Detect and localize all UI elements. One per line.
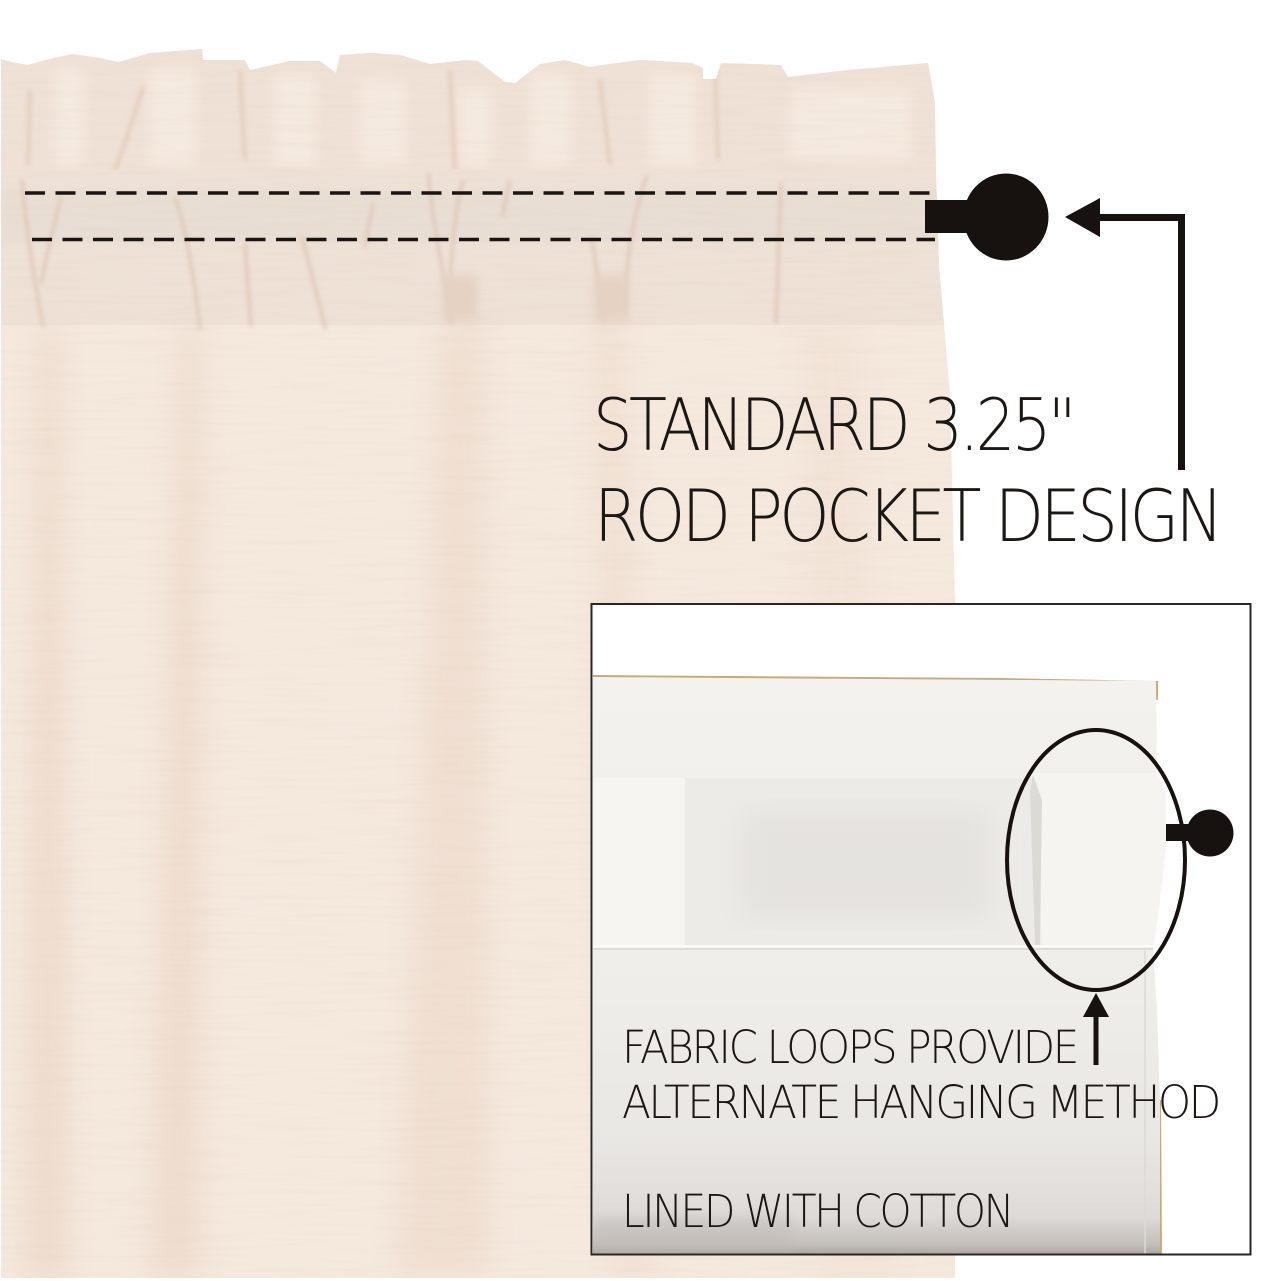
body folds xyxy=(22,334,647,1278)
gathered ruffle header xyxy=(1,49,936,170)
panel: fabric loops inset xyxy=(592,604,1250,1256)
heading: rod pocket design: STANDARD 3.25" xyxy=(593,383,1073,467)
text: lining note: LINED WITH COTTON xyxy=(622,1185,1012,1238)
heading: rod pocket design xyxy=(593,383,1220,558)
panel border xyxy=(592,604,1250,1254)
arrow: points to fabric loop xyxy=(1083,993,1109,1065)
text: fabric loops note: ALTERNATE HANGING METHOD xyxy=(622,1076,1219,1129)
lining photo xyxy=(593,675,1170,1256)
icon: small curtain rod xyxy=(1166,810,1234,856)
text: fabric loops note: FABRIC LOOPS PROVIDE xyxy=(622,1021,1077,1074)
dashed rod pocket guide lines xyxy=(25,193,935,240)
rod pocket band xyxy=(0,170,960,330)
linen slub texture xyxy=(0,40,960,1280)
heading: rod pocket design: ROD POCKET DESIGN xyxy=(594,474,1220,558)
icon: curtain rod xyxy=(925,174,1048,260)
highlight ellipse around loop xyxy=(1007,730,1185,990)
curtain photo xyxy=(0,40,960,1280)
text: fabric loops note xyxy=(622,1021,1219,1129)
arrow: points to curtain rod xyxy=(1065,198,1185,470)
